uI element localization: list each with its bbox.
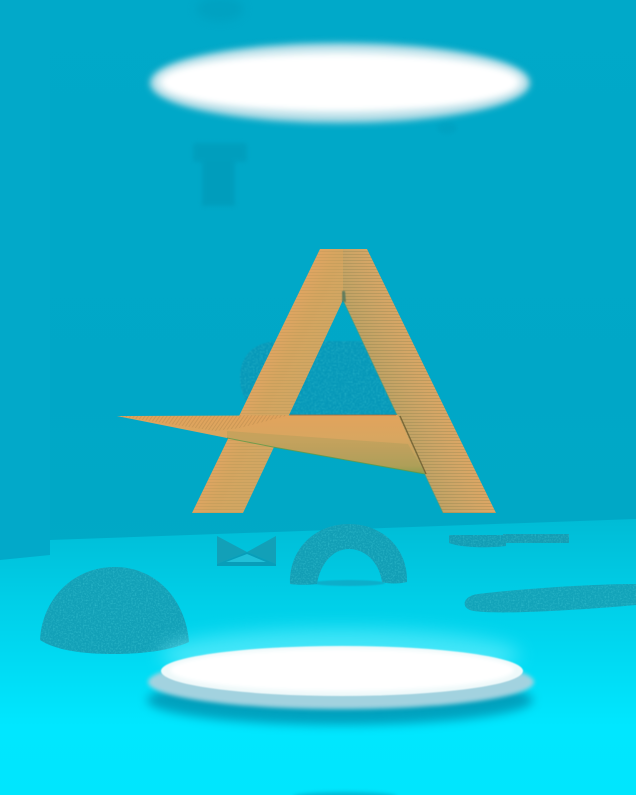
blade crossbar (117, 415, 425, 474)
apex notch shadow (342, 291, 346, 302)
flat disc object left (449, 535, 506, 547)
blade lower facet (227, 431, 425, 474)
shadow at bottom edge (293, 792, 397, 795)
blurred mark on right of ceiling light (437, 122, 457, 134)
bowtie object (217, 536, 276, 566)
right leg inner edge (343, 300, 443, 513)
floor (0, 519, 636, 795)
blade lower edge (227, 438, 425, 474)
long pill object (465, 584, 636, 612)
letter A (117, 249, 496, 513)
left leg (192, 249, 343, 513)
ceiling light ellipse (150, 43, 530, 123)
blurred object on upper wall (196, 0, 244, 21)
blurred column capital on wall (193, 143, 247, 206)
left wall column (0, 0, 50, 560)
textured sphere behind the letter (240, 341, 396, 415)
floor light: shadow under base (147, 675, 533, 725)
arch object (290, 524, 407, 586)
blade diagonal hatching near tip (117, 415, 290, 431)
floor light: soft glow (160, 629, 520, 681)
dome object (40, 567, 189, 654)
blade top edge (290, 414, 396, 416)
floor light: white disc (161, 646, 523, 696)
floor light: base rim (148, 655, 534, 709)
right leg (343, 249, 496, 513)
flat bar object right (503, 534, 569, 543)
back wall (0, 0, 636, 560)
blade edge shadow (400, 416, 426, 474)
